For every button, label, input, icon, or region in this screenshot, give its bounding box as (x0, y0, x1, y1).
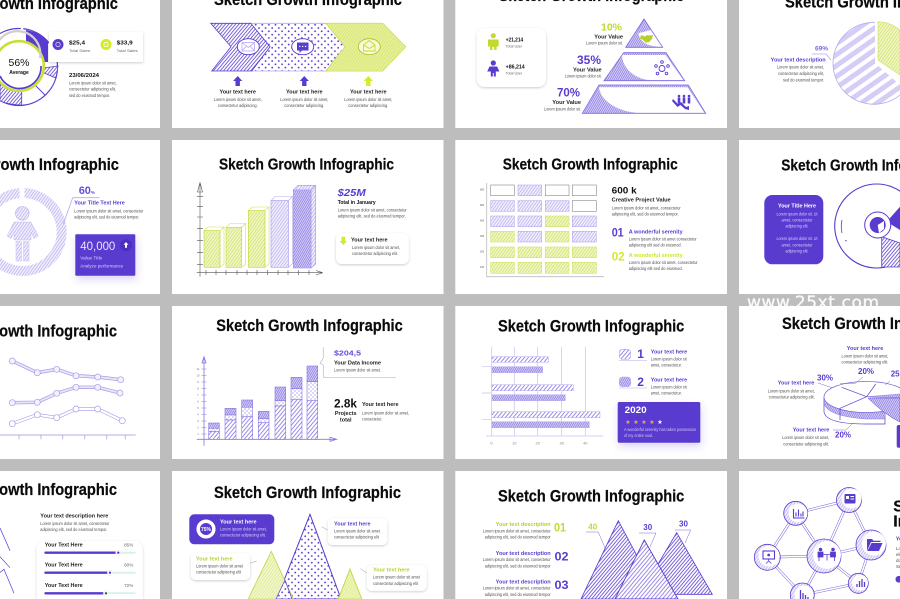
item 02: Lorem ipsum dolor sit amet, consectetur (483, 557, 551, 562)
callout 2: consectetur adipiscing elit (196, 570, 242, 575)
stacked bar chart: 9 (197, 380, 199, 384)
text block 1: Lorem ipsum dolor sit amet, (214, 97, 262, 102)
icon: team growth (672, 95, 690, 110)
item 01: Lorem ipsum dolor sit amet consectetur (629, 236, 697, 241)
user card: +86,214 (506, 64, 525, 70)
horizontal bar chart: 30 (559, 440, 565, 445)
stats card: $25,4 (69, 41, 86, 47)
callout 1: Your text here (334, 522, 370, 528)
income text: adipiscing elit, sed do eiusmod tempor. (338, 213, 406, 218)
label 35%: 35% (577, 55, 601, 67)
title: Sketch Growth Infographic (219, 156, 394, 174)
icon: envelope (237, 39, 259, 55)
item 03: adipiscing elit, sed do eiusmod tempor (485, 592, 551, 597)
projects total: Projects (335, 411, 357, 417)
grid chart: 200 (480, 250, 485, 254)
title: Sketch Growth Infographic (498, 317, 684, 336)
legend 1: 1 (637, 347, 644, 361)
stacked bar chart: 3 (197, 419, 199, 423)
item 01: adipiscing elit, sed do eiusmod tempor (485, 535, 551, 540)
icon: open mail (358, 39, 380, 55)
callout 2: Your text here (196, 556, 232, 562)
node: presentation (754, 544, 780, 570)
icon: handshake (640, 35, 653, 42)
projects total: Your text here (362, 402, 398, 408)
stacked bar chart: 2 (197, 426, 199, 430)
callout 1 (322, 518, 387, 545)
value labels: 30 (643, 523, 653, 532)
label left: Your text here (778, 381, 814, 387)
user card (477, 28, 546, 87)
3D pie chart (818, 377, 900, 430)
label left: Lorem ipsum dolor sit amet, (768, 389, 815, 394)
item 02: Your text description (496, 551, 551, 557)
date text: sed do eiusmod tempor. (69, 93, 110, 98)
panel: pie chart (739, 0, 900, 128)
purple card: adipiscing elit. (786, 249, 808, 254)
item 02: adipiscing elit sed do eiusmod. (629, 266, 683, 271)
label 10% (586, 22, 623, 45)
slider 3: 72% (124, 583, 133, 588)
callout 60%: adipiscing elit, sed do eiusmod tempor. (74, 214, 139, 219)
node: folder (856, 530, 886, 560)
panel: network (739, 471, 900, 599)
horizontal bar chart: 0 (490, 440, 493, 445)
rating card: A wonderful serenity has taken possession (624, 427, 697, 432)
icon: chat (292, 39, 314, 55)
label text: 69% (815, 46, 828, 53)
stacked bar chart: 4 (197, 412, 199, 416)
legend 2: Lorem ipsum dolor sit (651, 384, 687, 389)
label left: consectetur adipiscing elit. (769, 395, 815, 400)
purple donut card: Lorem ipsum dolor sit amet, (220, 527, 267, 532)
callout 1: consectetur adipiscing elit (334, 535, 380, 540)
income text: Total in January (338, 200, 376, 206)
date text (69, 73, 117, 98)
icon: network (655, 61, 669, 75)
callout 3: Your text here (373, 568, 410, 574)
item 02 (483, 549, 569, 568)
stacked bar chart (196, 357, 337, 446)
purple card: amet, consectetur (782, 218, 813, 223)
label 10%: 10% (601, 22, 623, 34)
icon: down arrow (340, 237, 347, 245)
slider 1: 85% (124, 542, 133, 547)
purple card: amet, consectetur (782, 242, 813, 247)
stats card: $33,9 (117, 41, 133, 47)
slider 1: Your Text Here (45, 542, 83, 548)
legend 1: Lorem ipsum dolor sit (651, 356, 687, 361)
percent values: 20% (858, 367, 874, 376)
description text (40, 513, 110, 532)
line 3 (9, 406, 125, 427)
text block 2: Lorem ipsum dolor sit amet, (280, 97, 328, 102)
panel: horizontal bars (455, 306, 727, 459)
label left (768, 381, 815, 400)
purple card: adipiscing elit. (786, 224, 808, 229)
purple donut card: Your text here (220, 519, 257, 525)
rating card: ★ (625, 419, 631, 426)
panel: triangles callouts (172, 471, 444, 599)
bar 4 (271, 196, 292, 267)
panel: pyramid (455, 0, 727, 128)
legend 2: 2 (637, 375, 644, 389)
data income callout: Your Data Income (334, 360, 381, 366)
project value text: adipiscing elit, sed do eiusmod tempor. (612, 211, 679, 216)
arrow: up 2 (300, 76, 309, 86)
pie chart (833, 20, 900, 104)
horizontal bar chart: 40 (583, 440, 588, 445)
date text: 23/06/2024 (69, 73, 100, 79)
label text (771, 46, 831, 82)
title: Sketch Growth Infographic (214, 483, 401, 502)
item 01: 01 (612, 226, 624, 240)
user card: +21,214 (506, 37, 523, 43)
title: Sketch Growth Infographic (498, 487, 684, 506)
percent values: 20% (835, 431, 851, 440)
callout 2: Lorem ipsum dolor sit amet (196, 564, 244, 569)
item 03: Your text description (496, 580, 551, 586)
project value text (612, 185, 681, 216)
item 02: 02 (554, 549, 569, 563)
bar chart (197, 183, 323, 277)
label 10%: Your Value (594, 34, 623, 40)
callout 3: consectetur adipiscing elit (373, 581, 419, 586)
callout 1: Lorem ipsum dolor sit amet (334, 529, 381, 534)
project value text: Lorem ipsum dolor sit amet, consectetur (612, 205, 681, 210)
label 70% (544, 88, 581, 111)
text block 3: Lorem ipsum dolor sit amet, (344, 97, 392, 102)
line chart (0, 358, 136, 439)
legend 1: Your text here (651, 350, 687, 356)
value labels: 30 (679, 520, 688, 529)
description text: Your text description here (40, 513, 108, 519)
mountain chart (581, 521, 712, 599)
watermark: www.25xt.com (747, 293, 879, 313)
grid chart: 500 (480, 204, 485, 207)
item 02: 02 (612, 250, 625, 264)
callout 60%: Your Title Text Here (74, 200, 125, 206)
bar 2 (226, 224, 246, 267)
label bottom: consectetur adipiscing elit. (783, 441, 829, 446)
callout 60%: Lorem ipsum dolor sit amet, consectetur (74, 208, 144, 213)
panel: chevron arrow (172, 0, 444, 128)
stacked bar chart: 5 (197, 406, 199, 410)
item 03: Lorem ipsum dolor sit amet, consectetur (483, 586, 551, 591)
slider 3: Your Text Here (45, 583, 83, 589)
panel: donut average (0, 0, 160, 128)
text card (336, 233, 409, 264)
purple card edge (897, 425, 900, 448)
stat card: Analyze performance (80, 263, 124, 268)
projects total: total (340, 417, 352, 423)
purple card: Lorem ipsum dolor sit. Ut (776, 236, 818, 241)
rating card: ★ (633, 419, 639, 426)
label 70%: 70% (557, 88, 580, 100)
icon: female user (487, 60, 499, 76)
date text: Lorem ipsum dolor sit amet, (69, 81, 117, 86)
grid chart: 400 (480, 220, 485, 222)
label 35%: Your Value (573, 67, 602, 73)
donut chart: Average (9, 70, 29, 76)
donut chart (0, 24, 58, 106)
projects total: Lorem ipsum dolor sit amet, (362, 410, 409, 415)
projects total (334, 397, 409, 423)
panel: stacked bars (172, 306, 444, 459)
slider 2 (44, 563, 136, 575)
stacked bar chart: 7 (197, 393, 199, 397)
slider 2: Your Text Here (45, 563, 83, 569)
item 01: adipiscing elit sed do eiusmod. (629, 242, 682, 247)
stat card (75, 234, 135, 276)
icon: male user (488, 33, 499, 50)
income text (337, 188, 407, 218)
line 2 (9, 384, 123, 406)
title (893, 499, 900, 531)
label text: Lorem ipsum dolor sit amet, (777, 65, 824, 70)
text block 1 (214, 90, 262, 108)
legend 2: Your text here (651, 378, 687, 384)
data income callout: Lorem ipsum dolor sit amet. (334, 368, 381, 373)
label 70%: Lorem ipsum dolor sit. (544, 106, 581, 111)
projects total: consectetur. (362, 416, 382, 421)
callout 3 (360, 565, 427, 591)
income text: Lorem ipsum dolor sit amet, consectetur (338, 207, 407, 212)
title: Sketch Growth Infographic (503, 156, 678, 174)
stats card: Total Sales (69, 49, 90, 53)
label 10%: Lorem ipsum dolor sit. (586, 40, 623, 45)
line 1 (9, 358, 124, 383)
circle chart (835, 184, 900, 268)
bar 3 (248, 207, 269, 267)
text block 3: consectetur adipiscing. (348, 103, 388, 108)
panel: numbered mountains (455, 471, 727, 599)
purple card: Your Title Here (778, 203, 816, 209)
project value text: 600 k (612, 185, 637, 196)
percent values: 30% (817, 373, 833, 382)
item 02 (612, 250, 698, 271)
text block 2: consectetur adipiscing. (284, 103, 324, 108)
node: chart (784, 501, 808, 525)
user card: Total User (506, 44, 523, 48)
value labels (588, 520, 688, 532)
item 01 (483, 521, 566, 540)
projects total: 2.8k (334, 397, 357, 411)
panel: circle chart (739, 140, 900, 294)
item 01: A wonderful serenity (629, 229, 684, 235)
grid chart (480, 183, 604, 277)
date text: consectetur adipiscing elit, (69, 87, 116, 92)
description text: Lorem ipsum dolor sit amet, consectetur (40, 521, 110, 526)
node: id card (836, 488, 862, 512)
node: bars (790, 583, 814, 599)
stats card (49, 32, 143, 62)
panel: line chart (0, 306, 160, 459)
legend 1 (619, 347, 687, 367)
stacked bar chart: 1 (197, 432, 199, 436)
text card: consectetur adipiscing elit. (352, 251, 398, 256)
item 01: Your text description (496, 522, 551, 528)
rating card (618, 402, 700, 443)
label bottom (782, 428, 829, 446)
text card: Lorem ipsum dolor sit amet, (352, 245, 400, 250)
label text: sed do eiusmod tempor. (783, 77, 824, 82)
text block 3 (344, 90, 392, 108)
item 02: Lorem ipsum dolor sit amet, consectetur (629, 260, 698, 265)
label top: Your text here (847, 346, 883, 352)
bar 5 (293, 185, 316, 268)
donut chart: 56% (8, 57, 30, 69)
rating card: of my entire soul. (624, 433, 653, 438)
sketch arrows (0, 528, 14, 593)
data income callout: $204,5 (334, 349, 361, 358)
slider 3 (44, 583, 136, 596)
percent values (817, 367, 900, 440)
horizontal bar chart (482, 347, 603, 445)
legend 2: amet, consectetur. (651, 390, 682, 395)
item 03: 03 (554, 578, 569, 592)
rating card: ★ (657, 419, 663, 426)
item 01: 01 (554, 521, 566, 535)
label 35% (565, 55, 602, 78)
text card: Your text here (351, 238, 388, 244)
item 03 (483, 578, 569, 597)
callout 60% (63, 185, 144, 224)
label 35%: Lorem ipsum dolor sit. (565, 73, 602, 78)
label 70%: Your Value (552, 100, 581, 106)
panel: tile grid chart (455, 140, 727, 294)
text block 1: consectetur adipiscing. (218, 103, 258, 108)
side text (896, 537, 900, 582)
bar 1 (204, 227, 224, 267)
arrow: up 1 (233, 76, 242, 86)
pyramid chart (582, 19, 706, 113)
panel: person donut (0, 140, 160, 294)
item 01: Lorem ipsum dolor sit amet, consectetur (483, 528, 551, 533)
stacked bar chart: 8 (197, 386, 199, 390)
label top: Lorem ipsum dolor sit amet, (842, 354, 888, 359)
callout 3: Lorem ipsum dolor sit amet (373, 575, 421, 580)
legend 2 (619, 375, 687, 395)
panel: 3D bar chart (172, 140, 444, 294)
purple donut card: consectetur adipiscing elit. (220, 533, 266, 538)
income text: $25M (337, 188, 366, 199)
grid chart: 100 (480, 266, 485, 269)
grid chart: 600 (480, 188, 485, 192)
label text: Your text description (771, 58, 826, 64)
node: meeting (807, 539, 841, 573)
label top (842, 346, 888, 365)
stacked bar chart: 11 (197, 367, 200, 371)
stacked bar chart: 6 (197, 400, 199, 404)
item 02: adipiscing elit, sed do eiusmod tempor (485, 563, 551, 568)
panel: 3D pie (739, 306, 900, 459)
legend 1: amet, consectetur. (651, 362, 682, 367)
label bottom: Your text here (793, 428, 829, 434)
title: Sketch Growth Infographic (216, 316, 403, 335)
user card: Total User (506, 72, 523, 76)
project value text: Creative Project Value (612, 197, 671, 203)
grid chart: 300 (480, 235, 485, 238)
description text: adipiscing elit, sed do eiusmod tempor. (40, 527, 107, 532)
text block 3: Your text here (350, 90, 387, 96)
slider 2: 60% (124, 563, 133, 568)
data income callout (320, 347, 396, 377)
callout 2 (191, 553, 257, 580)
node: small chart (848, 573, 868, 593)
purple donut card (189, 514, 274, 544)
label top: consectetur adipiscing elit. (842, 360, 888, 365)
rating card: 2020 (625, 405, 647, 416)
value labels: 40 (588, 522, 598, 531)
rating card: ★ (641, 419, 647, 426)
horizontal bar chart: 20 (535, 440, 541, 445)
chevron arrow (211, 23, 406, 71)
item 01 (612, 226, 697, 247)
text block 1: Your text here (219, 90, 256, 96)
arrow: up 3 (364, 76, 373, 86)
label bottom: Lorem ipsum dolor sit amet, (782, 435, 829, 440)
purple card (764, 195, 823, 264)
stats card: Total Sales (117, 49, 138, 53)
horizontal bar chart: 10 (512, 440, 517, 445)
person donut chart (0, 185, 62, 271)
stacked bar chart: 10 (196, 374, 200, 378)
stat card: 40,000 (80, 239, 116, 253)
label text: consectetur adipiscing elit, (778, 71, 824, 76)
text block 2: Your text here (286, 90, 323, 96)
slider card (37, 541, 143, 599)
slider 1 (44, 542, 136, 555)
callout 60%: 60% (79, 185, 95, 197)
item 02: A wonderful serenity (629, 253, 684, 259)
purple donut card: 75% (201, 527, 212, 533)
network diagram (754, 488, 886, 599)
panel: slider bars (0, 471, 160, 599)
text block 2 (280, 90, 328, 108)
stat card: Value Title (80, 256, 103, 261)
rating card: ★ (649, 419, 655, 426)
triangle chart (248, 514, 362, 599)
purple card: Lorem ipsum dolor sit. Ut (776, 212, 818, 217)
